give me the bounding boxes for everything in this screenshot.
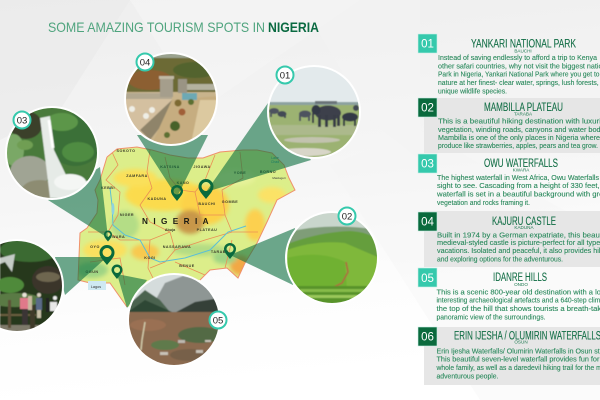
state borders [88, 150, 258, 292]
number badge 05 [418, 268, 437, 287]
body 04 [437, 230, 600, 264]
photo 05: Idanre hills [127, 273, 222, 368]
map labels: KANO [177, 181, 189, 185]
body 01 [438, 53, 600, 95]
map labels: PLATEAU [197, 228, 217, 232]
body 06 [436, 346, 600, 380]
heading 03: OWU WATERFALLS [484, 158, 558, 170]
heading 04: KAJURU CASTLE [492, 216, 556, 228]
photo 02: plateau [285, 211, 380, 306]
map labels: NIGERIA [142, 217, 214, 226]
body 06: adventurous people. [436, 372, 498, 380]
state 03: KWARA [513, 168, 530, 172]
body 05 [436, 288, 600, 322]
body 03: vegetation and rocks framing it. [437, 198, 530, 207]
title: NIGERIA [268, 19, 319, 35]
heading 05: IDANRE HILLS [493, 272, 547, 284]
info panel 04: Kajuru Castle [418, 211, 600, 267]
badge 01 [276, 66, 294, 84]
number badge 06: 06 [421, 332, 434, 344]
state 04: KADUNA [514, 225, 535, 230]
number badge 02: 02 [421, 102, 434, 114]
wedge 02 [230, 228, 295, 285]
wedge 03 [48, 167, 108, 238]
pin 02 [224, 243, 236, 259]
map labels: Abuja [165, 228, 176, 232]
pin 03 [104, 230, 112, 242]
map labels: OYO [90, 245, 100, 249]
badge 02: 02 [342, 212, 352, 222]
body 03 [436, 173, 600, 207]
photo 04: castle [124, 52, 218, 148]
map labels: Maiduguri [272, 176, 286, 180]
map labels: BORNO [260, 170, 276, 174]
wedge 05 [117, 274, 147, 308]
map labels: SOKOTO [117, 149, 135, 153]
map labels [85, 149, 286, 290]
map labels: Lake [271, 156, 279, 160]
info panel 02: Mambilla Plateau [418, 98, 600, 153]
info panel 03: Owu Waterfalls [418, 154, 600, 207]
photo 01: elephants [267, 65, 361, 160]
badge 03 [14, 112, 30, 128]
state 05: ONDO [514, 282, 528, 287]
info panel 06: Erin Ijesha / Olumirin Waterfalls [418, 327, 600, 385]
state 02: TARABA [514, 112, 533, 116]
state 01: BAUCHI [514, 48, 532, 54]
heading 02: MAMBILLA PLATEAU [484, 102, 563, 114]
wedge 01 [206, 103, 311, 192]
number badge 03: 03 [421, 158, 434, 170]
map labels: BAUCHI [198, 202, 216, 206]
badge 04: 04 [140, 58, 150, 68]
pin 04 [171, 185, 183, 201]
badge 04 [136, 54, 154, 70]
map labels: YOBE [234, 171, 246, 175]
number badge 01 [418, 34, 437, 53]
body 01: unique wildlife species. [438, 86, 507, 95]
body 02 [438, 116, 600, 150]
number badge 01: 01 [421, 38, 434, 50]
map labels: KADUNA [148, 197, 166, 201]
body 02: This is a beautiful hiking destination with luxuriant [438, 116, 600, 126]
pin 06 [100, 245, 114, 265]
number badge 02 [418, 98, 437, 117]
state 06: OSUN [514, 340, 528, 344]
number badge 04 [418, 212, 437, 231]
badge 05 [210, 312, 226, 328]
badge 03: 03 [17, 116, 27, 126]
map labels: Chad [271, 160, 279, 164]
body 05: panoramic view of the surroundings. [436, 312, 546, 322]
map labels: KWARA [109, 235, 125, 239]
pin 05 [112, 264, 122, 279]
map labels: KOGI [144, 256, 156, 260]
badge 02 [338, 208, 356, 224]
map labels: GOMBE [222, 200, 238, 204]
number badge 04: 04 [421, 216, 434, 228]
map labels: KATSINA [160, 165, 180, 169]
rivers [110, 188, 246, 262]
map labels: TARABA [211, 250, 229, 254]
map labels: JIGAWA [193, 165, 211, 169]
photo 03: waterfall [4, 106, 103, 201]
number badge 03 [418, 154, 437, 173]
photo 06: Erin Ijesha waterfall hikers [0, 238, 64, 335]
map of Nigeria [78, 146, 296, 308]
wedge 04 [137, 135, 208, 197]
wedge 06 [55, 257, 107, 295]
map labels: OGUN [85, 270, 99, 274]
number badge 06 [418, 327, 437, 346]
badge 05: 05 [213, 316, 223, 326]
body 04: and exploring options for the adventurous. [437, 254, 563, 264]
map labels: Lagos [91, 285, 101, 289]
map labels: BENUE [179, 264, 195, 268]
pin 01 [198, 179, 214, 199]
info panel 01: Yankari National Park [418, 34, 600, 95]
info panel 05: Idanre Hills [418, 268, 600, 322]
title: SOME AMAZING TOURISM SPOTS IN [48, 19, 265, 35]
map labels: ZAMFARA [126, 174, 148, 178]
map labels: NASSARAWA [163, 245, 191, 249]
badge 01: 01 [280, 70, 290, 82]
number badge 05: 05 [421, 273, 434, 285]
map labels: NIGER [120, 213, 134, 217]
map labels: KEBBI [101, 186, 115, 190]
